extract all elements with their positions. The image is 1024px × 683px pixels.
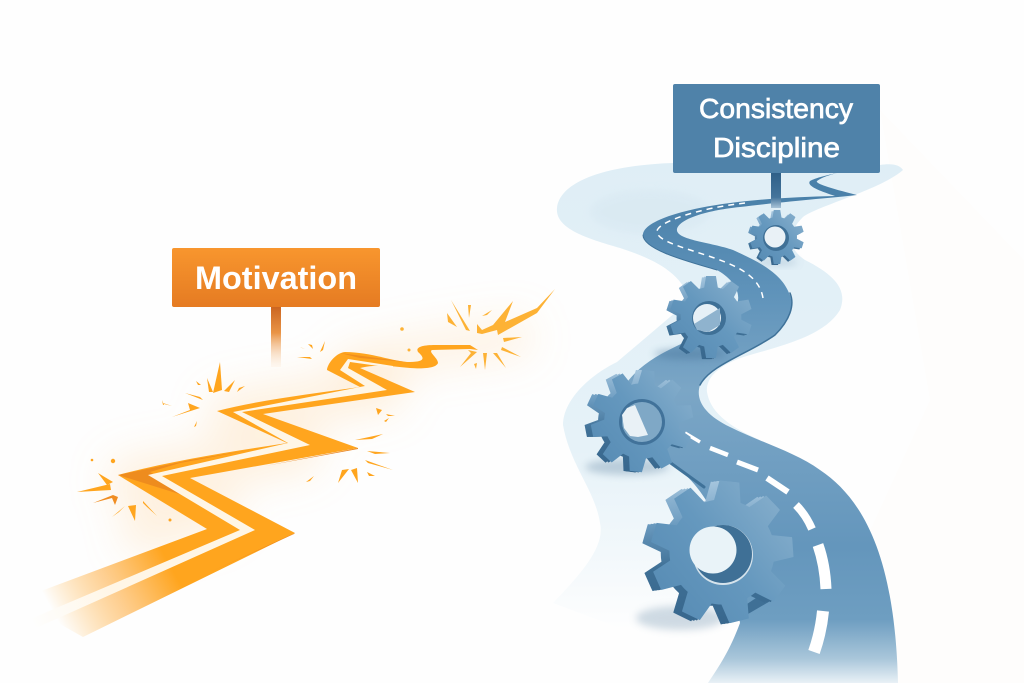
- dark shading on road bends: [118, 353, 407, 572]
- lower road dashes: [685, 433, 826, 652]
- sparks: [77, 289, 555, 522]
- spark: near signpost: [297, 341, 325, 359]
- sign: Consistency Discipline: [673, 84, 880, 208]
- sign: Motivation: Motivation: [195, 260, 357, 296]
- orange lightning road: [17, 345, 478, 637]
- faint cream panel on the right: [800, 110, 1024, 683]
- gear: third: [584, 370, 691, 478]
- spark: middle bend: [306, 408, 395, 483]
- sign: Motivation: [172, 248, 380, 367]
- sign: Consistency Discipline: Discipline: [713, 132, 840, 163]
- gear: small far: [748, 210, 804, 265]
- dark road edges: [643, 235, 792, 487]
- blue winding road: [621, 173, 898, 683]
- sign: Consistency Discipline: Consistency: [699, 93, 853, 124]
- darker halo lobe: [590, 190, 710, 234]
- spark: lightning tip: [400, 289, 555, 370]
- gear: large front: [634, 472, 801, 633]
- gear: second: [654, 276, 752, 360]
- spark: lower left bend: [77, 459, 172, 522]
- spark: upper left bend: [162, 362, 245, 427]
- road centre line: [28, 359, 393, 628]
- light blue halo around the road: [553, 163, 903, 683]
- upper road dashes: [657, 203, 763, 298]
- orange glow behind lightning road: [125, 335, 530, 535]
